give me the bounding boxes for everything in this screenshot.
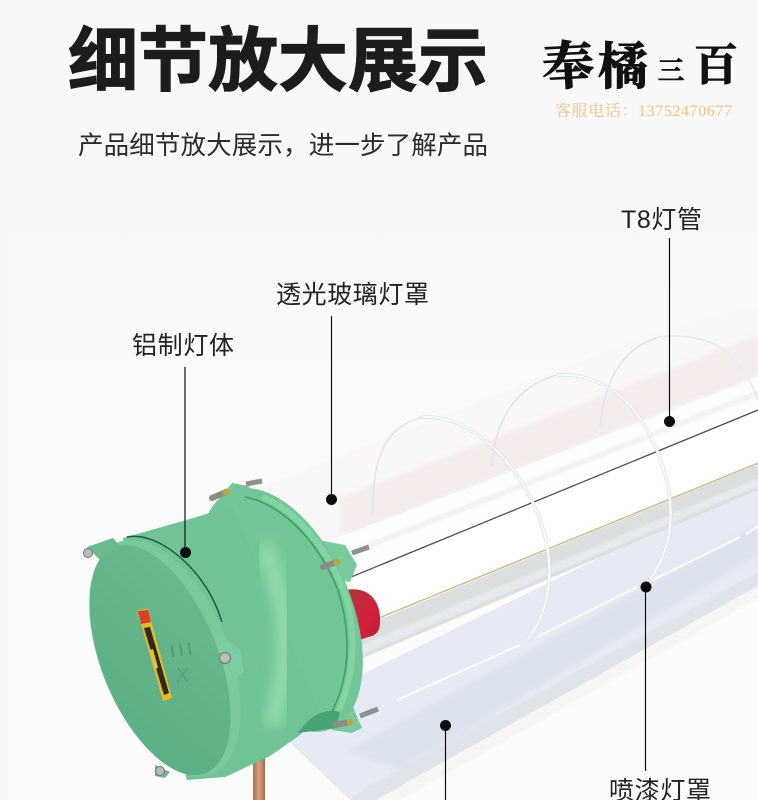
embossed marks: X: [176, 665, 189, 687]
callout: T8 tube: [621, 206, 702, 427]
brand name calligraphy: 奉: [541, 38, 596, 97]
cover rim: [59, 518, 271, 798]
wire ring 1: [373, 417, 549, 640]
flange bolts: [212, 488, 354, 726]
flange tabs: [216, 483, 262, 510]
cover face: [61, 525, 259, 795]
callout: glass shade: [276, 281, 429, 505]
wire ring 3: [600, 336, 758, 427]
red indicator: [345, 589, 380, 645]
brand name calligraphy: [541, 38, 738, 97]
brand name calligraphy: 三: [658, 57, 684, 86]
callout: painted shade: [609, 582, 711, 800]
embossed marks: [169, 639, 193, 687]
dark separator line: [300, 410, 758, 598]
callout: reflector: [440, 720, 451, 800]
callout: aluminium body: [132, 332, 234, 558]
brand name calligraphy: 百: [694, 41, 738, 90]
subtitle: 产品细节放大展示，进一步了解产品: [78, 132, 488, 160]
white rod: [397, 526, 758, 700]
gold edge line: [330, 463, 758, 638]
reflector shade: [285, 480, 758, 800]
wire ring 2: [492, 375, 671, 580]
label: 透光玻璃灯罩: [276, 281, 429, 309]
screws: [84, 548, 230, 776]
flange shading: [245, 497, 347, 715]
cover tabs: [87, 538, 120, 560]
copper rod: [253, 745, 265, 800]
brand logo: [541, 38, 738, 120]
T8 tube lower: [300, 411, 758, 650]
lamp body: [59, 464, 396, 798]
label: T8灯管: [621, 206, 702, 234]
flange: [166, 464, 396, 756]
housing: [123, 506, 320, 780]
glass upper cover and back tube: [230, 305, 758, 560]
customer service phone: 客服电话：13752470677: [555, 102, 732, 120]
glass lower band: [330, 464, 758, 672]
brand name calligraphy: 橘: [598, 39, 648, 95]
warning label: [137, 609, 172, 701]
photo backdrop: [8, 200, 758, 800]
cover seam line: [127, 536, 222, 622]
bolts rear: [246, 481, 378, 716]
title: 细节放大展示: [68, 22, 488, 100]
label: 铝制灯体: [132, 332, 234, 360]
T8 tube upper: [300, 377, 758, 598]
embossed marks: III: [169, 639, 193, 661]
product photo illustration: [59, 305, 758, 800]
